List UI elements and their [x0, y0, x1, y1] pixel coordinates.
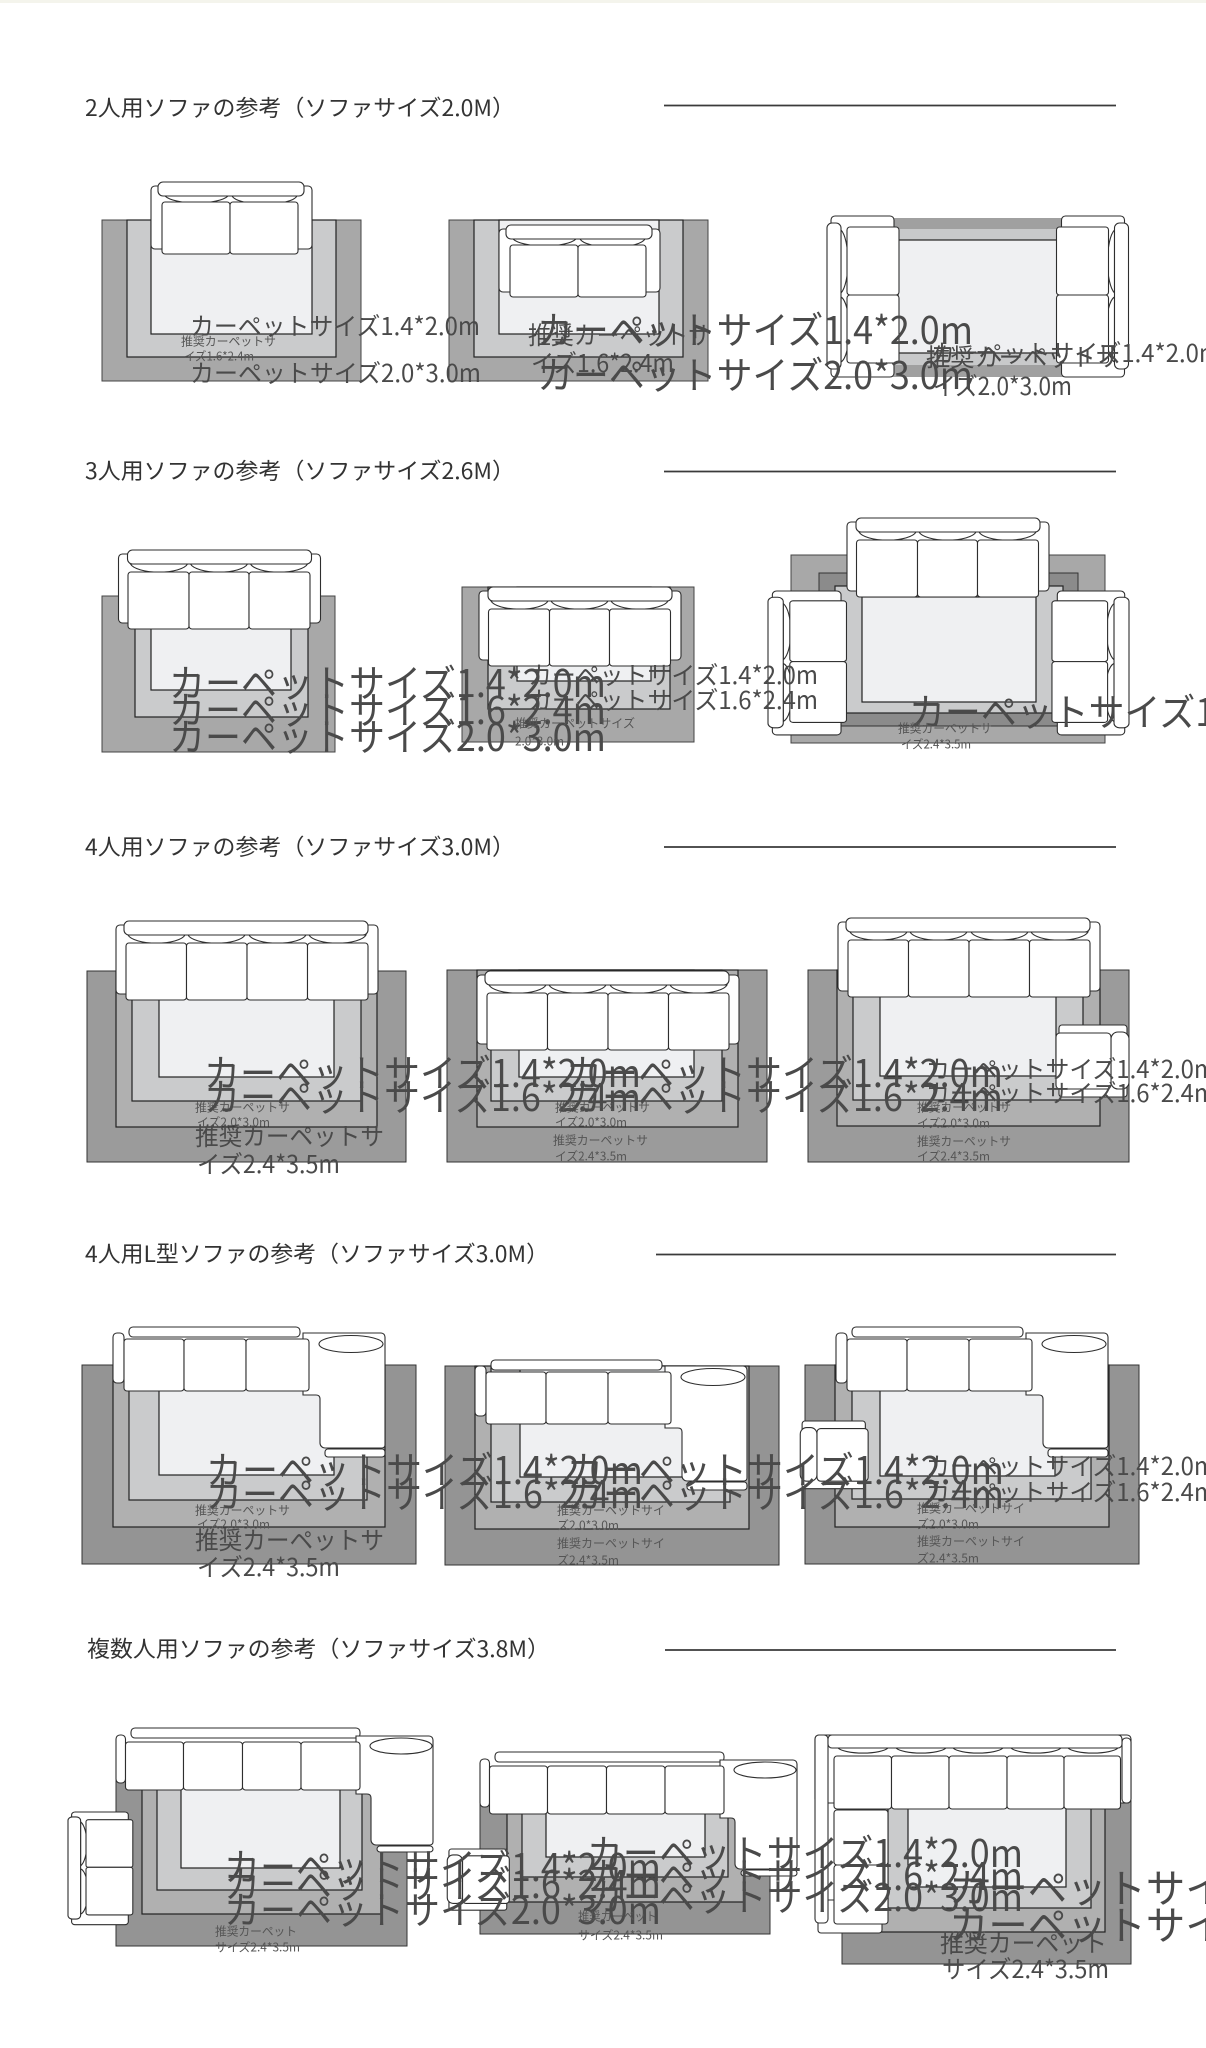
labels: diagram 1: イズ2.0*3.0m: [197, 1114, 270, 1130]
labels: diagram 1: [195, 1043, 641, 1181]
labels: diagram 3: 推奨カーペット: [940, 1925, 1107, 1960]
diagram: L-shaped sofa inside rug: [445, 1360, 779, 1565]
labels: diagram 2: イズ2.0*3.0m: [555, 1114, 627, 1130]
heading rule: [665, 1649, 1116, 1651]
labels: diagram 2: カーペットサイズ1.4*2.0m: [566, 1043, 1003, 1098]
labels: diagram 1: イズ1.6*2.4m: [184, 348, 254, 364]
labels: diagram 3: [917, 1448, 1206, 1566]
labels: diagram 2: カーペットサイズ1.4*2.0m: [528, 657, 818, 692]
heading: 3人用ソファの参考（ソファサイズ2.6M）: [85, 454, 515, 486]
labels: diagram 1: カーペットサイズ1.6*2.4m: [169, 680, 606, 735]
diagram: large L-shaped sofa with side sofa: [68, 1728, 433, 1946]
diagram: 2-seat sofa on rug: [102, 182, 361, 381]
labels: diagram 3: 推奨カーペットサイ: [917, 1532, 1025, 1550]
labels: diagram 1: カーペットサイズ2.0*3.0m: [190, 355, 481, 390]
labels: diagram 2: カーペットサイズ1.6*2.4m: [566, 1067, 1003, 1122]
heading rule: [664, 104, 1116, 106]
diagram: 3-seat sofa with two side sofas: [768, 518, 1129, 743]
labels: diagram 1: イズ2.0*3.0m: [197, 1516, 270, 1532]
labels: diagram 2: [515, 657, 818, 750]
labels: diagram 3: [926, 335, 1206, 403]
labels: diagram 2: カーペットサイズ1.6*2.4m: [587, 1846, 1023, 1901]
heading: 4人用L型ソファの参考（ソファサイズ3.0M）: [85, 1237, 549, 1269]
labels: diagram 1: 推奨カーペット: [215, 1922, 297, 1940]
labels: diagram 1: カーペットサイズ2.0*3.0m: [224, 1880, 661, 1935]
labels: diagram 3: イズ2.4*3.5m: [917, 1148, 990, 1164]
labels: diagram 1: カーペットサイズ1.4*2.0m: [206, 1440, 643, 1495]
labels: diagram 3: [917, 1051, 1206, 1164]
labels: diagram 1: 推奨カーペットサ: [195, 1118, 384, 1153]
labels: diagram 2: 推奨カーペットサイ: [557, 1502, 665, 1518]
labels: diagram 1: 推奨カーペットサ: [195, 1522, 384, 1557]
labels: diagram 2: カーペットサイズ1.4*2.0m: [537, 300, 973, 355]
labels: diagram 3: イズ2.0*3.0m: [933, 368, 1072, 403]
labels: diagram 3: イズ2.0*3.0m: [917, 1114, 990, 1132]
section: 4-seat L-shaped sofa: [82, 1237, 1206, 1584]
diagram: 4-seat sofa on rug: [87, 921, 406, 1162]
labels: diagram 1: カーペットサイズ1.6*2.4m: [206, 1464, 643, 1519]
heading rule: [664, 846, 1116, 848]
labels: diagram 1: [169, 653, 606, 762]
labels: diagram 3: ズ2.4*3.5m: [917, 1550, 979, 1566]
diagram: 5-seat corner sofa on rug: [815, 1735, 1131, 1964]
heading: 複数人用ソファの参考（ソファサイズ3.8M）: [87, 1632, 550, 1664]
labels: diagram 2: サイズ2.4*3.5m: [578, 1926, 663, 1944]
labels: diagram 2: 推奨カーペットサ: [553, 1132, 648, 1148]
diagram: facing sofas on rug: [827, 216, 1128, 377]
labels: diagram 3: 推奨カーペットサ: [917, 1098, 1011, 1116]
labels: diagram 1: カーペットサイズ2.0*3.0m: [169, 707, 606, 762]
diagram: 4-seat sofa inside rug: [447, 970, 767, 1162]
labels: diagram 3: 推奨カーペットサイ: [917, 1500, 1025, 1516]
labels: diagram 3: 推奨カーペットサ: [917, 1132, 1011, 1150]
labels: diagram 2: ズ2.0*3.0m: [557, 1516, 619, 1534]
labels: diagram 2: ズ2.4*3.5m: [557, 1552, 619, 1568]
section: 3-seat sofa: [85, 454, 1206, 762]
top strip: [0, 0, 1206, 3]
diagram: 4-seat sofa with armchair: [808, 918, 1129, 1162]
labels: diagram 1: 推奨カーペットサ: [195, 1502, 290, 1518]
labels: diagram 1: [215, 1837, 661, 1956]
diagram: 2-seat sofa inside rug: [449, 220, 708, 381]
sofa: [815, 1735, 1131, 1933]
labels: diagram 1: 推奨カーペットサ: [181, 332, 276, 350]
labels: diagram 1: カーペットサイズ1.4*2.0m: [169, 653, 606, 708]
labels: diagram 2: カーペットサイズ2.0*3.0m: [537, 345, 973, 400]
labels: diagram 2: カーペットサイズ1.6*2.4m: [567, 1464, 1004, 1519]
labels: diagram 3: サイズ2.4*3.5m: [942, 1951, 1109, 1986]
section: 2-seat sofa: [85, 91, 1206, 403]
labels: diagram 3: [940, 1856, 1206, 1986]
heading: 2人用ソファの参考（ソファサイズ2.0M）: [85, 91, 515, 123]
labels: diagram 1: [195, 1440, 643, 1584]
labels: diagram 1: カーペットサイズ1.4*2.0m: [204, 1043, 641, 1098]
labels: diagram 3: イズ2.4*3.5m: [901, 736, 971, 752]
heading: 4人用ソファの参考（ソファサイズ3.0M）: [85, 830, 515, 862]
labels: diagram 2: イズ1.6*2.4m: [531, 345, 674, 380]
labels: diagram 2: イズ2.4*3.5m: [555, 1148, 627, 1164]
heading rule: [656, 1254, 1116, 1256]
labels: diagram 2: 推奨カーペットサ: [528, 317, 711, 352]
labels: diagram 2: [578, 1823, 1023, 1944]
labels: diagram 2: [528, 300, 973, 400]
labels: diagram 1: カーペットサイズ1.4*2.0m: [190, 308, 480, 343]
diagram: 3-seat sofa inside rug: [462, 587, 694, 742]
diagram: 3-seat sofa on rug: [102, 550, 335, 752]
labels: diagram 1: サイズ2.4*3.5m: [215, 1938, 300, 1956]
labels: diagram 1: イズ2.4*3.5m: [197, 1549, 340, 1584]
labels: diagram 2: [557, 1440, 1004, 1568]
labels: diagram 2: カーペットサイズ1.4*2.0m: [587, 1823, 1023, 1878]
labels: diagram 1: イズ2.4*3.5m: [197, 1146, 340, 1181]
labels: diagram 2: 推奨カーペットサイズ: [515, 714, 635, 732]
labels: diagram 2: 推奨カーペットサ: [555, 1098, 650, 1116]
section: multi-seat sofa: [68, 1632, 1206, 1986]
labels: diagram 2: カーペットサイズ1.4*2.0m: [567, 1440, 1004, 1495]
labels: diagram 2: 2.0*3.0m: [515, 732, 564, 750]
labels: diagram 2: [553, 1043, 1003, 1164]
diagram: L-shaped sofa with armchair: [800, 1327, 1139, 1564]
section: 4-seat sofa: [85, 830, 1206, 1181]
diagram: large L-shaped sofa with armchair: [447, 1752, 797, 1934]
labels: diagram 1: カーペットサイズ1.6*2.4m: [204, 1067, 641, 1122]
labels: diagram 3: ズ2.0*3.0m: [917, 1516, 979, 1532]
labels: diagram 2: カーペットサイズ2.0*3.0m: [587, 1867, 1023, 1922]
labels: diagram 2: 推奨カーペット: [578, 1908, 657, 1924]
labels: diagram 2: 推奨カーペットサイ: [557, 1534, 665, 1552]
labels: diagram 2: カーペットサイズ1.6*2.4m: [528, 682, 818, 717]
diagram: L-shaped sofa on rug: [82, 1327, 416, 1564]
heading rule: [664, 470, 1116, 472]
labels: diagram 3: 推奨カーペットサ: [926, 339, 1120, 374]
labels: diagram 1: カーペットサイズ1.6*2.4m: [224, 1854, 661, 1909]
labels: diagram 1: カーペットサイズ1.4*2.0m: [224, 1837, 661, 1892]
labels: diagram 1: [181, 308, 481, 390]
labels: diagram 3: 推奨カーペットサ: [898, 720, 992, 736]
labels: diagram 1: 推奨カーペットサ: [195, 1098, 290, 1116]
